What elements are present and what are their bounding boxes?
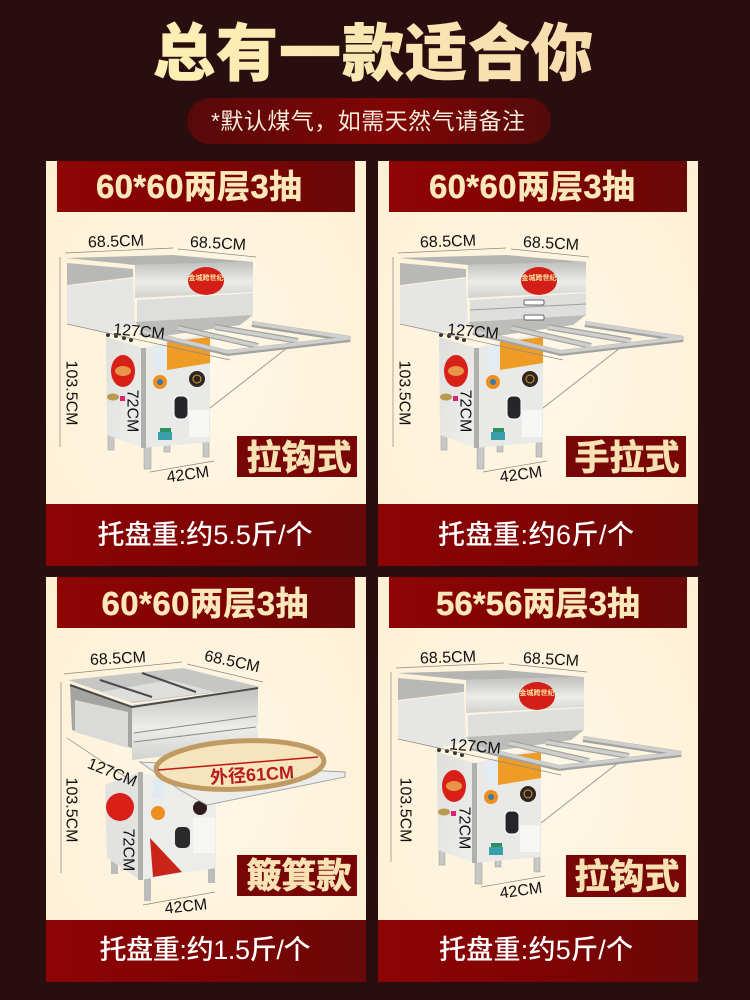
dimension labels: 127CM: [85, 755, 139, 791]
header: size: 60*60两层3抽: [429, 168, 635, 205]
dimension labels: [396, 233, 579, 486]
dimension labels: 68.5CM: [88, 233, 144, 251]
tag: type: 手拉式: [574, 439, 680, 478]
dimension labels: 72CM: [456, 807, 472, 849]
dimension labels: [62, 648, 261, 918]
callout: outer diameter: 外径61CM: [209, 762, 295, 788]
dimension labels: 72CM: [120, 829, 136, 871]
dimension labels: 42CM: [499, 880, 543, 902]
dimension labels: 72CM: [124, 390, 140, 432]
dimension labels: 68.5CM: [523, 234, 579, 254]
header: size: [389, 577, 687, 628]
dimension labels: 42CM: [164, 896, 208, 918]
machine illustration: [393, 248, 683, 472]
dimension labels: 42CM: [499, 464, 543, 486]
dimension labels: 42CM: [166, 464, 210, 486]
footer: tray weight: [46, 920, 366, 982]
tag: type: 簸箕款: [246, 857, 352, 896]
machine illustration: [61, 662, 345, 905]
machine illustration: [60, 248, 350, 472]
header: size: 60*60两层3抽: [102, 585, 308, 622]
tag: type: 拉钩式: [246, 439, 352, 478]
footer: tray weight: [378, 920, 698, 982]
dimension labels: 68.5CM: [420, 649, 476, 667]
footer: tray weight: [378, 504, 698, 566]
dimension labels: 68.5CM: [420, 233, 476, 251]
dimension labels: 68.5CM: [90, 649, 146, 669]
machine illustration: [391, 663, 681, 887]
footer: tray weight: 托盘重:约5斤/个: [439, 935, 633, 965]
dimension labels: 68.5CM: [190, 234, 246, 254]
dimension labels: 127CM: [113, 321, 165, 343]
panel: top-right product: [378, 161, 698, 566]
dimension labels: 72CM: [456, 390, 474, 432]
dimension labels: 68.5CM: [523, 650, 579, 670]
dimension labels: 127CM: [449, 736, 501, 758]
dimension labels: [396, 649, 579, 902]
dimension labels: 103.5CM: [396, 361, 412, 425]
header: size: [389, 161, 687, 212]
header: size: 60*60两层3抽: [96, 168, 302, 205]
dimension labels: [62, 233, 246, 486]
dimension labels: 68.5CM: [203, 648, 261, 676]
tag: type: 拉钩式: [574, 858, 680, 897]
dimension labels: 103.5CM: [396, 778, 414, 842]
panel: bottom-left product: [46, 577, 366, 982]
footer: tray weight: [46, 504, 366, 566]
footer: tray weight: 托盘重:约6斤/个: [438, 520, 634, 550]
dimension labels: 127CM: [447, 321, 499, 343]
panel: bottom-right product: [378, 577, 698, 982]
dimension labels: 103.5CM: [62, 361, 80, 425]
footer: tray weight: 托盘重:约1.5斤/个: [100, 935, 310, 965]
footer: tray weight: 托盘重:约5.5斤/个: [98, 520, 312, 550]
subtitle pill: [187, 98, 551, 144]
header: size: 56*56两层3抽: [436, 585, 640, 622]
subtitle pill: *默认煤气，如需天然气请备注: [211, 108, 525, 134]
title: 总有一款适合你: [153, 20, 593, 89]
header: size: [57, 161, 355, 212]
dimension labels: 103.5CM: [62, 778, 80, 842]
header: size: [57, 577, 355, 628]
panel: top-left product: [46, 161, 366, 566]
